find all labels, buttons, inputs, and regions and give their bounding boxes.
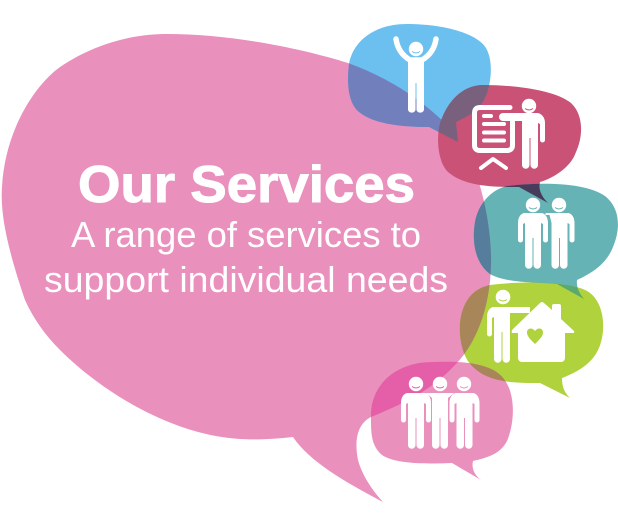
subtitle line two: support individual needs <box>44 259 448 300</box>
subtitle line one: A range of services to <box>71 214 421 255</box>
icon: two people side by side <box>518 198 574 269</box>
panel: small pink speech bubble <box>371 362 513 480</box>
panel: green speech bubble <box>455 275 603 398</box>
icon: person with raised arms <box>396 39 436 113</box>
panel: blue speech bubble <box>348 24 491 132</box>
panel: main pink speech bubble <box>2 34 491 502</box>
icon: person with house and heart <box>487 290 574 363</box>
title: Our Services <box>78 156 415 214</box>
panel: crimson speech bubble <box>438 85 582 187</box>
icon: presenter at a board <box>474 99 545 169</box>
panel: teal speech bubble <box>474 184 618 288</box>
icon: group of three people <box>401 377 480 449</box>
